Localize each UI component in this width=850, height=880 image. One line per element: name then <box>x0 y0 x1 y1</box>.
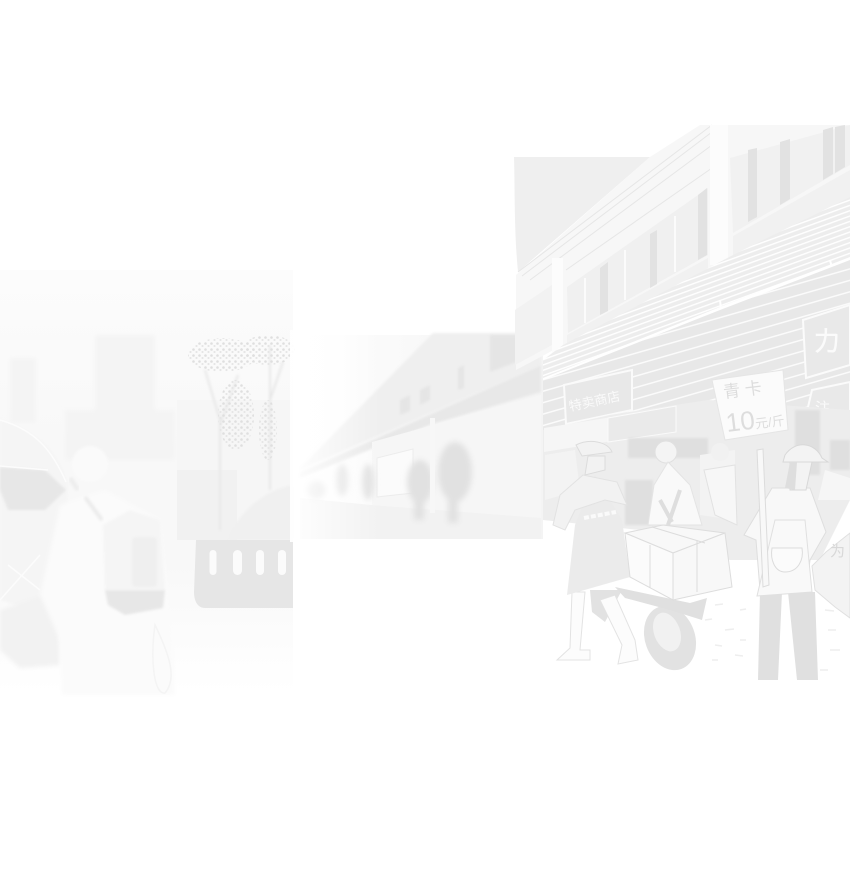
first floor windows <box>567 188 708 333</box>
photo background <box>300 335 543 539</box>
sky block <box>514 157 650 272</box>
frame <box>615 587 707 620</box>
shadow behind legs <box>590 590 622 622</box>
stall goods <box>545 450 735 520</box>
building columns <box>552 125 728 354</box>
left edge fade <box>290 330 380 542</box>
crate <box>625 525 725 553</box>
belt <box>584 512 616 518</box>
right photo block <box>177 400 293 540</box>
stall price label: 为 <box>830 543 845 560</box>
shaded canopy band <box>300 365 541 478</box>
hair <box>785 462 797 490</box>
second floor windows <box>730 125 850 233</box>
legs <box>557 592 590 660</box>
awning <box>543 197 850 378</box>
shop sign: left <box>564 370 632 424</box>
shirt <box>744 488 826 590</box>
sill band <box>567 170 850 348</box>
placard: 10元/斤 <box>724 401 786 438</box>
photo background haze <box>0 270 293 715</box>
placard <box>712 370 788 440</box>
market stalls and crowd background <box>543 400 850 560</box>
dark shop interior <box>625 410 850 525</box>
cap and head <box>576 441 612 475</box>
building upper floor <box>300 333 541 470</box>
shopper with cape <box>553 441 638 664</box>
shop wall siding <box>543 260 850 470</box>
shop window <box>377 449 413 497</box>
pavement <box>300 498 541 539</box>
placard: 青 卡 <box>722 378 763 402</box>
legs <box>758 592 818 680</box>
wheelbarrow <box>615 525 732 678</box>
shop sign: right <box>805 382 850 420</box>
panel: left street photo <box>0 270 295 715</box>
awning brackets <box>608 260 835 362</box>
person in protective suit <box>40 446 175 695</box>
vendor with placard <box>712 370 828 680</box>
shop sign: top right: カ <box>812 326 842 359</box>
placard pole <box>757 449 769 587</box>
left windows <box>515 285 552 365</box>
crowd figures <box>648 441 850 525</box>
roof edge lines <box>518 125 712 280</box>
dome shape <box>227 485 293 540</box>
ground floor wall <box>372 395 541 518</box>
dark barrier with four slots <box>194 540 293 608</box>
coat <box>567 475 630 595</box>
cobble dashes <box>705 604 840 670</box>
cape <box>553 475 627 530</box>
van <box>0 420 68 668</box>
shop sign: left: 特卖商店 <box>568 388 622 414</box>
panel: middle street photo <box>290 330 543 542</box>
apron <box>757 520 812 596</box>
upper floor windows <box>400 335 535 415</box>
distant tower blocks <box>10 335 175 460</box>
street trees <box>188 335 295 530</box>
stall banner <box>544 408 668 452</box>
wheel <box>635 598 705 678</box>
hat and face <box>783 445 828 490</box>
blurred palm trees <box>307 442 472 523</box>
backpack sprayer <box>103 510 165 615</box>
apron pocket <box>772 548 802 572</box>
pillar <box>430 418 435 513</box>
stall table <box>812 533 850 618</box>
panel: right market illustration <box>514 125 850 680</box>
building facade <box>516 125 850 370</box>
shop sign: top right <box>803 305 850 378</box>
shop sign: right: 注 <box>815 400 830 417</box>
